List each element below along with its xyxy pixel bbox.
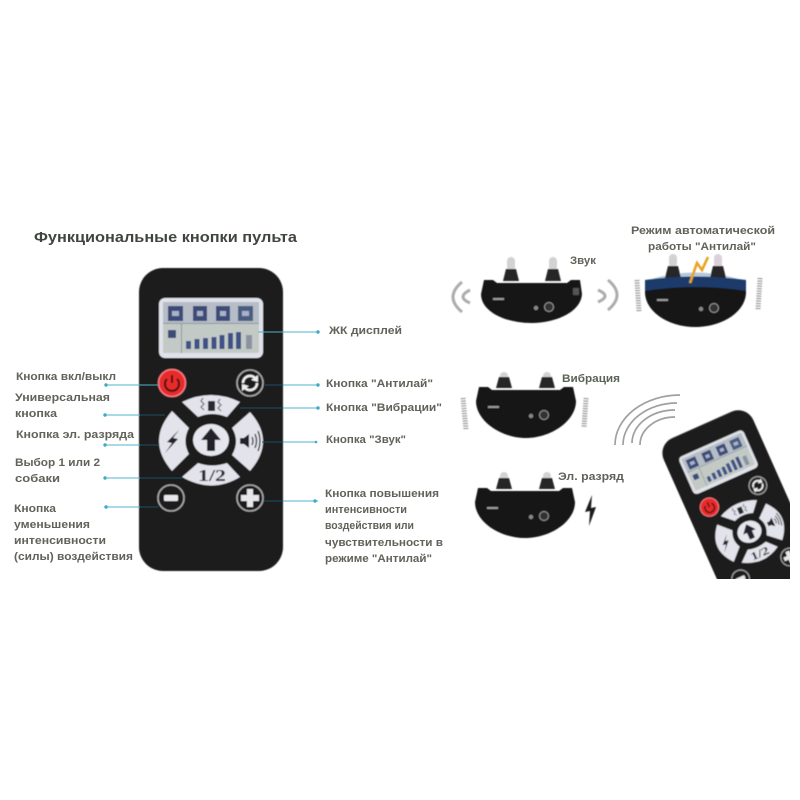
label: vibration mode: Вибрация <box>562 373 620 385</box>
label: sound mode: Звук <box>570 255 597 267</box>
lightning bolt <box>690 257 708 283</box>
collar <box>475 472 575 538</box>
label: shock: Кнопка эл. разряда <box>16 429 135 441</box>
lightning bolt <box>585 495 596 526</box>
label: automatic anti-bark mode <box>631 225 775 253</box>
label: decrease intensity <box>14 503 133 563</box>
power button <box>158 370 186 396</box>
infographic canvas <box>14 226 790 579</box>
collar <box>645 254 746 327</box>
label: dog selector: собаки <box>15 473 60 485</box>
vibration marks <box>463 398 586 430</box>
panel: collar anti-bark mode <box>637 254 760 327</box>
label: automatic anti-bark mode: работы "Антилай" <box>648 241 756 253</box>
panel: collar sound mode <box>453 257 617 323</box>
label: universal button: кнопка <box>15 408 58 420</box>
signal arcs <box>615 395 680 445</box>
label: increase intensity: Кнопка повышения <box>325 488 439 500</box>
label: automatic anti-bark mode: Режим автоматической <box>631 225 775 237</box>
collar <box>476 372 576 438</box>
label: vibration: Кнопка "Вибрации" <box>326 402 442 414</box>
title: Функциональные кнопки пульта <box>34 230 298 246</box>
label: decrease intensity: интенсивности <box>14 535 106 547</box>
up arrow button <box>193 424 229 456</box>
left button labels <box>14 371 135 563</box>
label: universal button: Универсальная <box>15 392 110 404</box>
label: dog selector <box>15 457 100 485</box>
leader lines <box>103 330 320 509</box>
plus button <box>237 485 263 511</box>
LCD display <box>159 298 263 358</box>
label: decrease intensity: (силы) воздействия <box>14 551 133 563</box>
anti-bark button <box>237 370 263 396</box>
label: sound: Кнопка "Звук" <box>326 434 406 446</box>
label: shock mode: Эл. разряд <box>558 471 624 483</box>
vibration marks <box>637 278 760 312</box>
label: power: Кнопка вкл/выкл <box>16 371 116 383</box>
label: LCD: ЖК дисплей <box>328 325 402 337</box>
minus button <box>158 485 184 511</box>
label: anti-bark: Кнопка "Антилай" <box>326 378 433 390</box>
label: increase intensity: чувствительности в <box>325 537 443 549</box>
vibration button <box>182 395 240 417</box>
label: universal button <box>15 392 110 420</box>
label: increase intensity: режиме "Антилай" <box>325 553 432 565</box>
panel: tilted remote <box>662 409 790 579</box>
panel: collar vibration mode <box>463 372 586 438</box>
label: increase intensity <box>325 488 443 565</box>
shock button <box>159 411 189 471</box>
label: decrease intensity: уменьшения <box>14 519 90 531</box>
panel: remote control front view <box>139 268 283 571</box>
panel: collar shock mode <box>475 472 596 538</box>
sound waves <box>453 280 617 312</box>
label: decrease intensity: Кнопка <box>14 503 57 515</box>
label: increase intensity: воздействия или <box>325 520 414 532</box>
right button labels <box>325 325 443 565</box>
label: dog selector: Выбор 1 или 2 <box>15 457 100 469</box>
collar <box>481 257 582 323</box>
dog selector button <box>182 463 240 486</box>
remote body <box>139 268 283 571</box>
dog selector button: 1/2 <box>198 466 226 485</box>
label: increase intensity: интенсивности <box>325 504 407 516</box>
sound button <box>232 412 263 471</box>
